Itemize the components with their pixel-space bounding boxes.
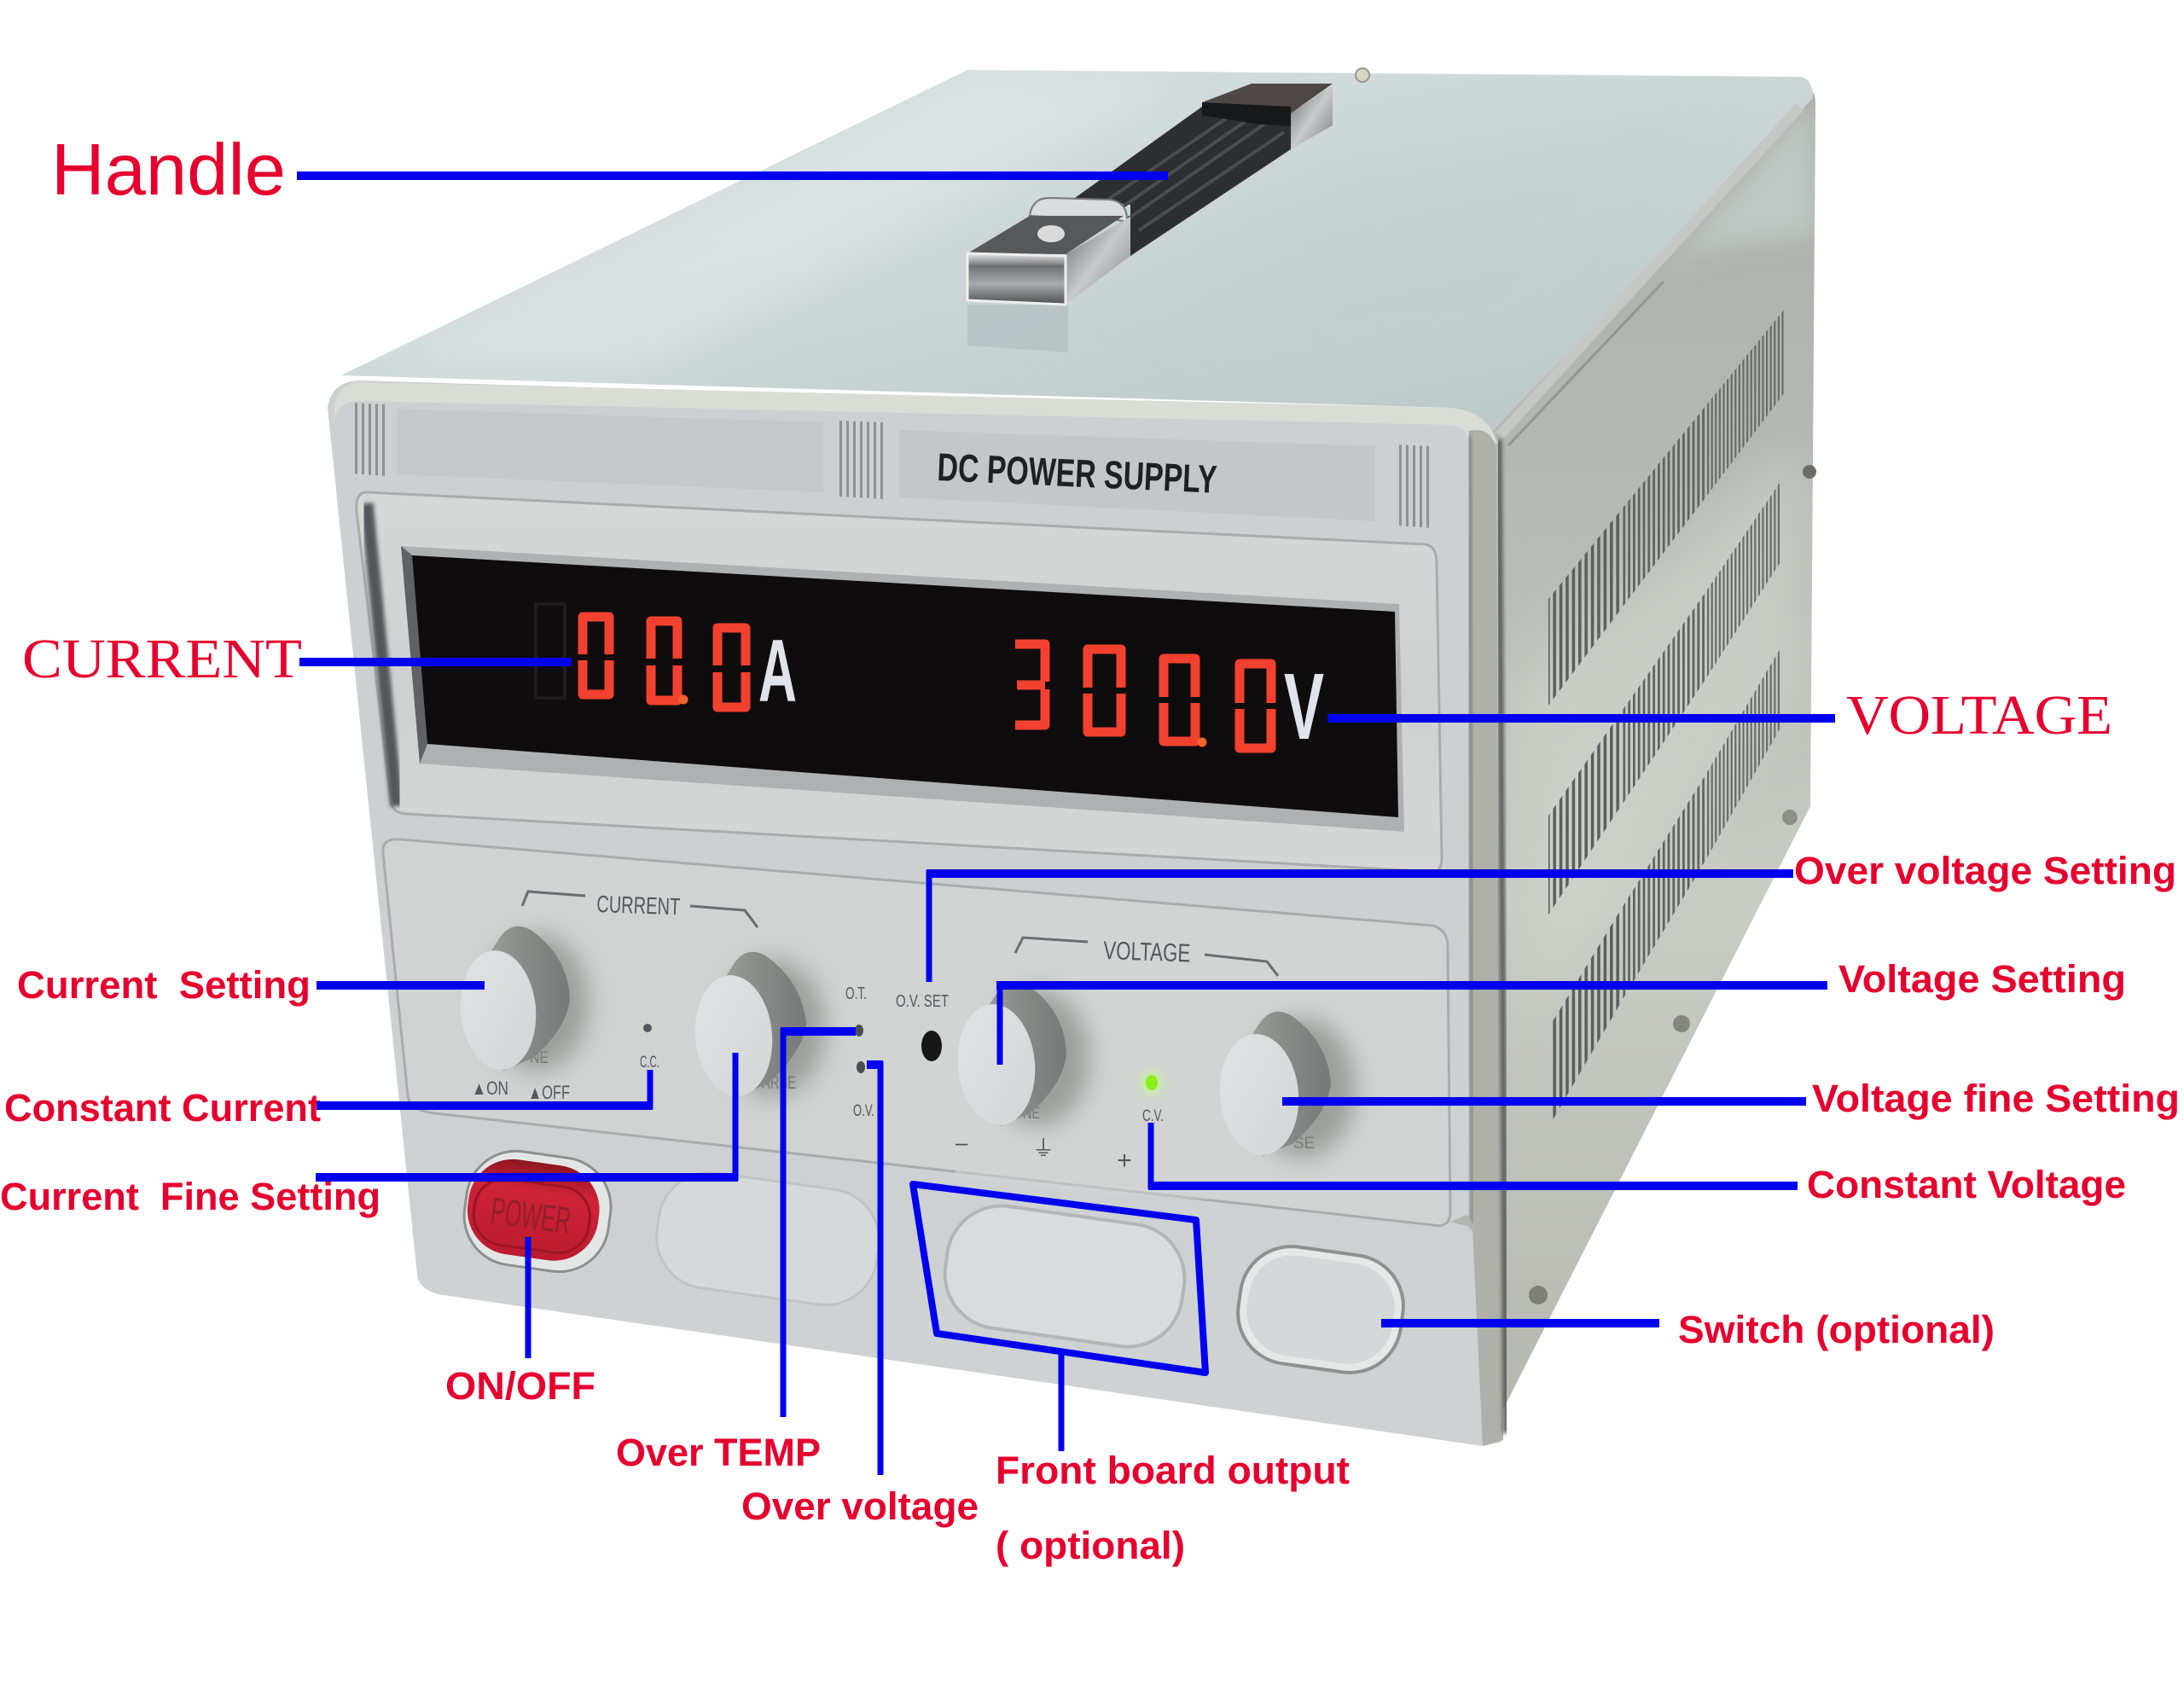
panel printed text: VOLTAGE bbox=[1103, 937, 1191, 968]
label: Switch (optional): Switch (optional) bbox=[1678, 1308, 1995, 1351]
label: Front board output with outline box: ( optional) bbox=[996, 1524, 1185, 1567]
label: Constant Voltage: Constant Voltage bbox=[1807, 1163, 2126, 1206]
control panel recess bbox=[383, 839, 1450, 1226]
optional switch cover bbox=[1231, 1240, 1410, 1379]
panel printed text: NE bbox=[1023, 1105, 1040, 1123]
panel printed text bbox=[472, 891, 1315, 1175]
handle bbox=[967, 84, 1333, 352]
label: Over TEMP: Over TEMP bbox=[616, 1431, 821, 1474]
panel printed text: C.V. bbox=[1142, 1107, 1164, 1125]
label: VOLTAGE display: VOLTAGE bbox=[1846, 684, 2112, 746]
black LED display window bbox=[412, 555, 1398, 817]
voltmeter digits: V bbox=[1284, 654, 1324, 759]
label: Current Fine Setting: Current Fine Setting bbox=[0, 1175, 380, 1218]
ammeter digits: A bbox=[758, 622, 797, 721]
ammeter digits bbox=[583, 617, 797, 721]
panel printed text: O.T. bbox=[845, 984, 867, 1003]
panel printed text: NE bbox=[530, 1049, 549, 1067]
indicator LEDs and O.V. set hole bbox=[643, 1024, 1164, 1095]
top cover bbox=[341, 68, 1813, 445]
power supply unit illustration bbox=[328, 68, 1817, 1446]
side face with vents bbox=[1483, 91, 1817, 1446]
panel printed text: ⏚ bbox=[1032, 1136, 1054, 1161]
knob: current setting bbox=[456, 926, 589, 1073]
knob: current fine setting bbox=[690, 952, 825, 1100]
power button: POWER bbox=[488, 1190, 573, 1242]
label: Handle: Handle bbox=[51, 130, 286, 211]
blank plug cover 1 bbox=[650, 1166, 886, 1311]
panel printed text: + bbox=[1117, 1147, 1132, 1175]
display bezel bbox=[357, 492, 1442, 872]
panel printed text: O.V. SET bbox=[896, 992, 949, 1011]
panel printed text: C.C. bbox=[640, 1054, 659, 1072]
panel printed text: SE bbox=[1293, 1135, 1315, 1153]
knob: voltage fine setting bbox=[1215, 1012, 1356, 1159]
brand text: DC POWER SUPPLY bbox=[937, 444, 1218, 502]
label: ON/OFF: ON/OFF bbox=[445, 1364, 595, 1408]
knob: voltage setting bbox=[953, 982, 1089, 1129]
label: Voltage Setting: Voltage Setting bbox=[1838, 957, 2126, 1001]
panel printed text: O.V. bbox=[853, 1102, 874, 1120]
label: Front board output with outline box bbox=[913, 1184, 1350, 1567]
front face bbox=[328, 380, 1506, 1446]
label: Current Setting: Current Setting bbox=[17, 963, 311, 1007]
top nameplates and grilles bbox=[351, 403, 1432, 528]
panel printed text: CURRENT bbox=[596, 891, 681, 920]
panel printed text: ▲OFF bbox=[528, 1082, 570, 1103]
label: Over voltage: Over voltage bbox=[741, 1484, 979, 1528]
voltmeter digits bbox=[1015, 644, 1324, 759]
label: Over voltage Setting: Over voltage Setting bbox=[1794, 849, 2176, 892]
label: Voltage fine Setting: Voltage fine Setting bbox=[1812, 1077, 2180, 1120]
panel printed text: – bbox=[956, 1130, 968, 1155]
label: Front board output with outline box: Front board output bbox=[996, 1449, 1350, 1492]
label: CURRENT display: CURRENT bbox=[22, 628, 302, 690]
panel printed text: ▲ON bbox=[472, 1077, 508, 1099]
panel printed text: ARSE bbox=[762, 1073, 796, 1093]
label: Constant Current: Constant Current bbox=[4, 1086, 321, 1130]
power button bbox=[458, 1145, 618, 1278]
front board output cover bbox=[938, 1199, 1192, 1354]
